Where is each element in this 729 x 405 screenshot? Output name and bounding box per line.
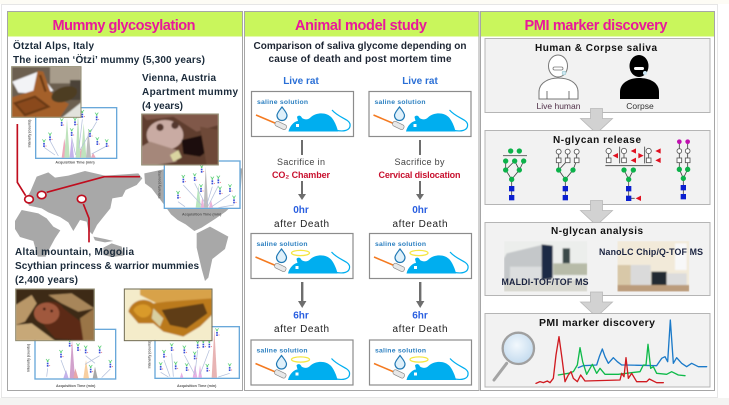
heading: Mummy glycosylation	[8, 12, 242, 36]
subtitle: cause of death and post mortem time	[268, 54, 452, 65]
icon: magnifying glass	[494, 333, 534, 380]
photo: NanoLC instrument	[617, 241, 689, 292]
rat box: 0hr right	[370, 234, 472, 278]
text: 6hr: 6hr	[293, 310, 309, 322]
text: Altai: (2,400 years)	[15, 275, 78, 286]
icon: live human: Live human	[537, 101, 581, 111]
heading: PMI marker discovery: PMI marker discovery	[524, 18, 668, 34]
panel: mummy glycosylation	[8, 12, 242, 390]
icon: live human	[537, 55, 581, 111]
chart: Otzi spectrum	[27, 108, 117, 164]
text: 0hr: after Death	[274, 219, 329, 230]
chart: Vienna spectrum: Acquisition Time (min)	[182, 213, 222, 217]
chart: Scythian warrior spectrum	[148, 327, 239, 388]
column labels: Live rat: Live rat	[283, 76, 319, 87]
heading: PMI marker discovery	[481, 12, 714, 36]
text: Otztal Alps: The iceman ‘Ötzi’ mummy (5,300 years)	[13, 53, 205, 66]
rat box: live right	[369, 92, 471, 136]
glycan 4	[677, 139, 690, 199]
map pointer lines	[17, 124, 140, 242]
text: Altai: Altai mountain, Mogolia	[15, 247, 134, 258]
arrows: to 0hr	[298, 181, 424, 200]
arrow: step 2	[580, 200, 612, 226]
text: 0hr: 0hr	[293, 205, 309, 216]
panel: animal model study	[244, 12, 479, 390]
chart: Scythian princess spectrum	[27, 329, 116, 388]
chart: Vienna spectrum	[157, 161, 240, 217]
box: N-glycan release	[485, 130, 710, 204]
column labels: Live rat: Live rat	[402, 76, 438, 87]
glycan 2	[556, 149, 579, 200]
rat box: live left	[252, 92, 354, 136]
photo: Scythian princess	[16, 289, 94, 341]
panel: PMI marker discovery	[480, 12, 714, 390]
column labels: Live rat	[283, 76, 438, 87]
icon: corpse: Corpse	[626, 101, 654, 111]
connector lines	[302, 140, 420, 155]
map: world map	[15, 168, 242, 281]
box: PMI marker discovery	[485, 314, 710, 387]
label: NanoLC: NanoLC Chip/Q-TOF MS	[599, 247, 703, 257]
rat box: 0hr left	[251, 234, 353, 278]
arrow: step 3	[580, 292, 612, 317]
icon: corpse	[620, 55, 659, 111]
text: 6hr: after Death	[392, 324, 448, 335]
rat box: 6hr right	[370, 340, 472, 385]
arrows: to 6hr	[298, 282, 424, 308]
subtitle: Comparison of saliva glycome depending on	[254, 41, 466, 52]
arrow: step 1	[580, 108, 612, 134]
label: MALDI: MALDI-TOF/TOF MS	[502, 277, 589, 287]
photo: Scythian warrior	[124, 289, 212, 341]
text: Vienna: Apartment mummy	[142, 87, 238, 98]
box: PMI marker discovery: PMI marker discovery	[539, 317, 655, 329]
heading: Animal model study: Animal model study	[295, 18, 427, 34]
chart: Vienna spectrum: Intensity (counts)	[157, 171, 161, 198]
text: sacrifice labels: Sacrifice by	[394, 157, 445, 167]
heading: Mummy glycosylation: Mummy glycosylation	[52, 18, 196, 34]
text: 0hr: 0hr	[412, 205, 428, 216]
chart: Otzi spectrum: Acquisition Time (min)	[55, 160, 95, 164]
box: N-glycan release: N-glycan release	[553, 135, 641, 146]
text: Vienna: Vienna, Austria	[142, 73, 216, 84]
text: Altai: Scythian princess & warrior mummies	[15, 261, 199, 272]
box: N-glycan analysis: N-glycan analysis	[551, 226, 643, 237]
chart: Scythian princess spectrum: Acquisition Time (min)	[56, 384, 96, 388]
text: 6hr: 6hr	[412, 310, 428, 322]
text: 0hr: after Death	[392, 219, 448, 230]
text: sacrifice labels	[272, 157, 460, 180]
box: Human and corpse saliva: Human & Corpse saliva	[535, 43, 657, 54]
chart: Scythian princess spectrum: Intensity (counts)	[27, 344, 31, 372]
photo: MALDI instrument	[504, 241, 587, 292]
chart: Scythian warrior spectrum: Intensity (counts)	[148, 341, 152, 368]
text: 6hr	[274, 310, 448, 335]
heading: Animal model study	[245, 12, 478, 36]
text: sacrifice labels: CO₂ Chamber	[272, 170, 330, 180]
glycan 1	[503, 148, 527, 200]
chart: Scythian warrior spectrum: Acquisition Time (min)	[177, 384, 217, 388]
rat box: 6hr left	[251, 340, 353, 385]
text: Vienna: (4 years)	[142, 101, 183, 112]
text: sacrifice labels: Sacrifice in	[277, 157, 325, 167]
chart: Otzi spectrum: Intensity (counts)	[27, 120, 31, 147]
box: Human and corpse saliva	[485, 38, 710, 112]
text: 0hr	[274, 205, 448, 230]
chart: chromatogram	[536, 320, 707, 383]
text: sacrifice labels: Cervical dislocation	[378, 170, 460, 180]
photo: Vienna mummy	[142, 114, 218, 165]
box: N-glycan analysis	[485, 222, 710, 296]
text: Otztal Alps: Ötztal Alps, Italy	[13, 39, 94, 52]
text: 6hr: after Death	[274, 324, 329, 335]
glycan 3	[605, 147, 661, 201]
photo: iceman Otzi	[12, 67, 81, 117]
